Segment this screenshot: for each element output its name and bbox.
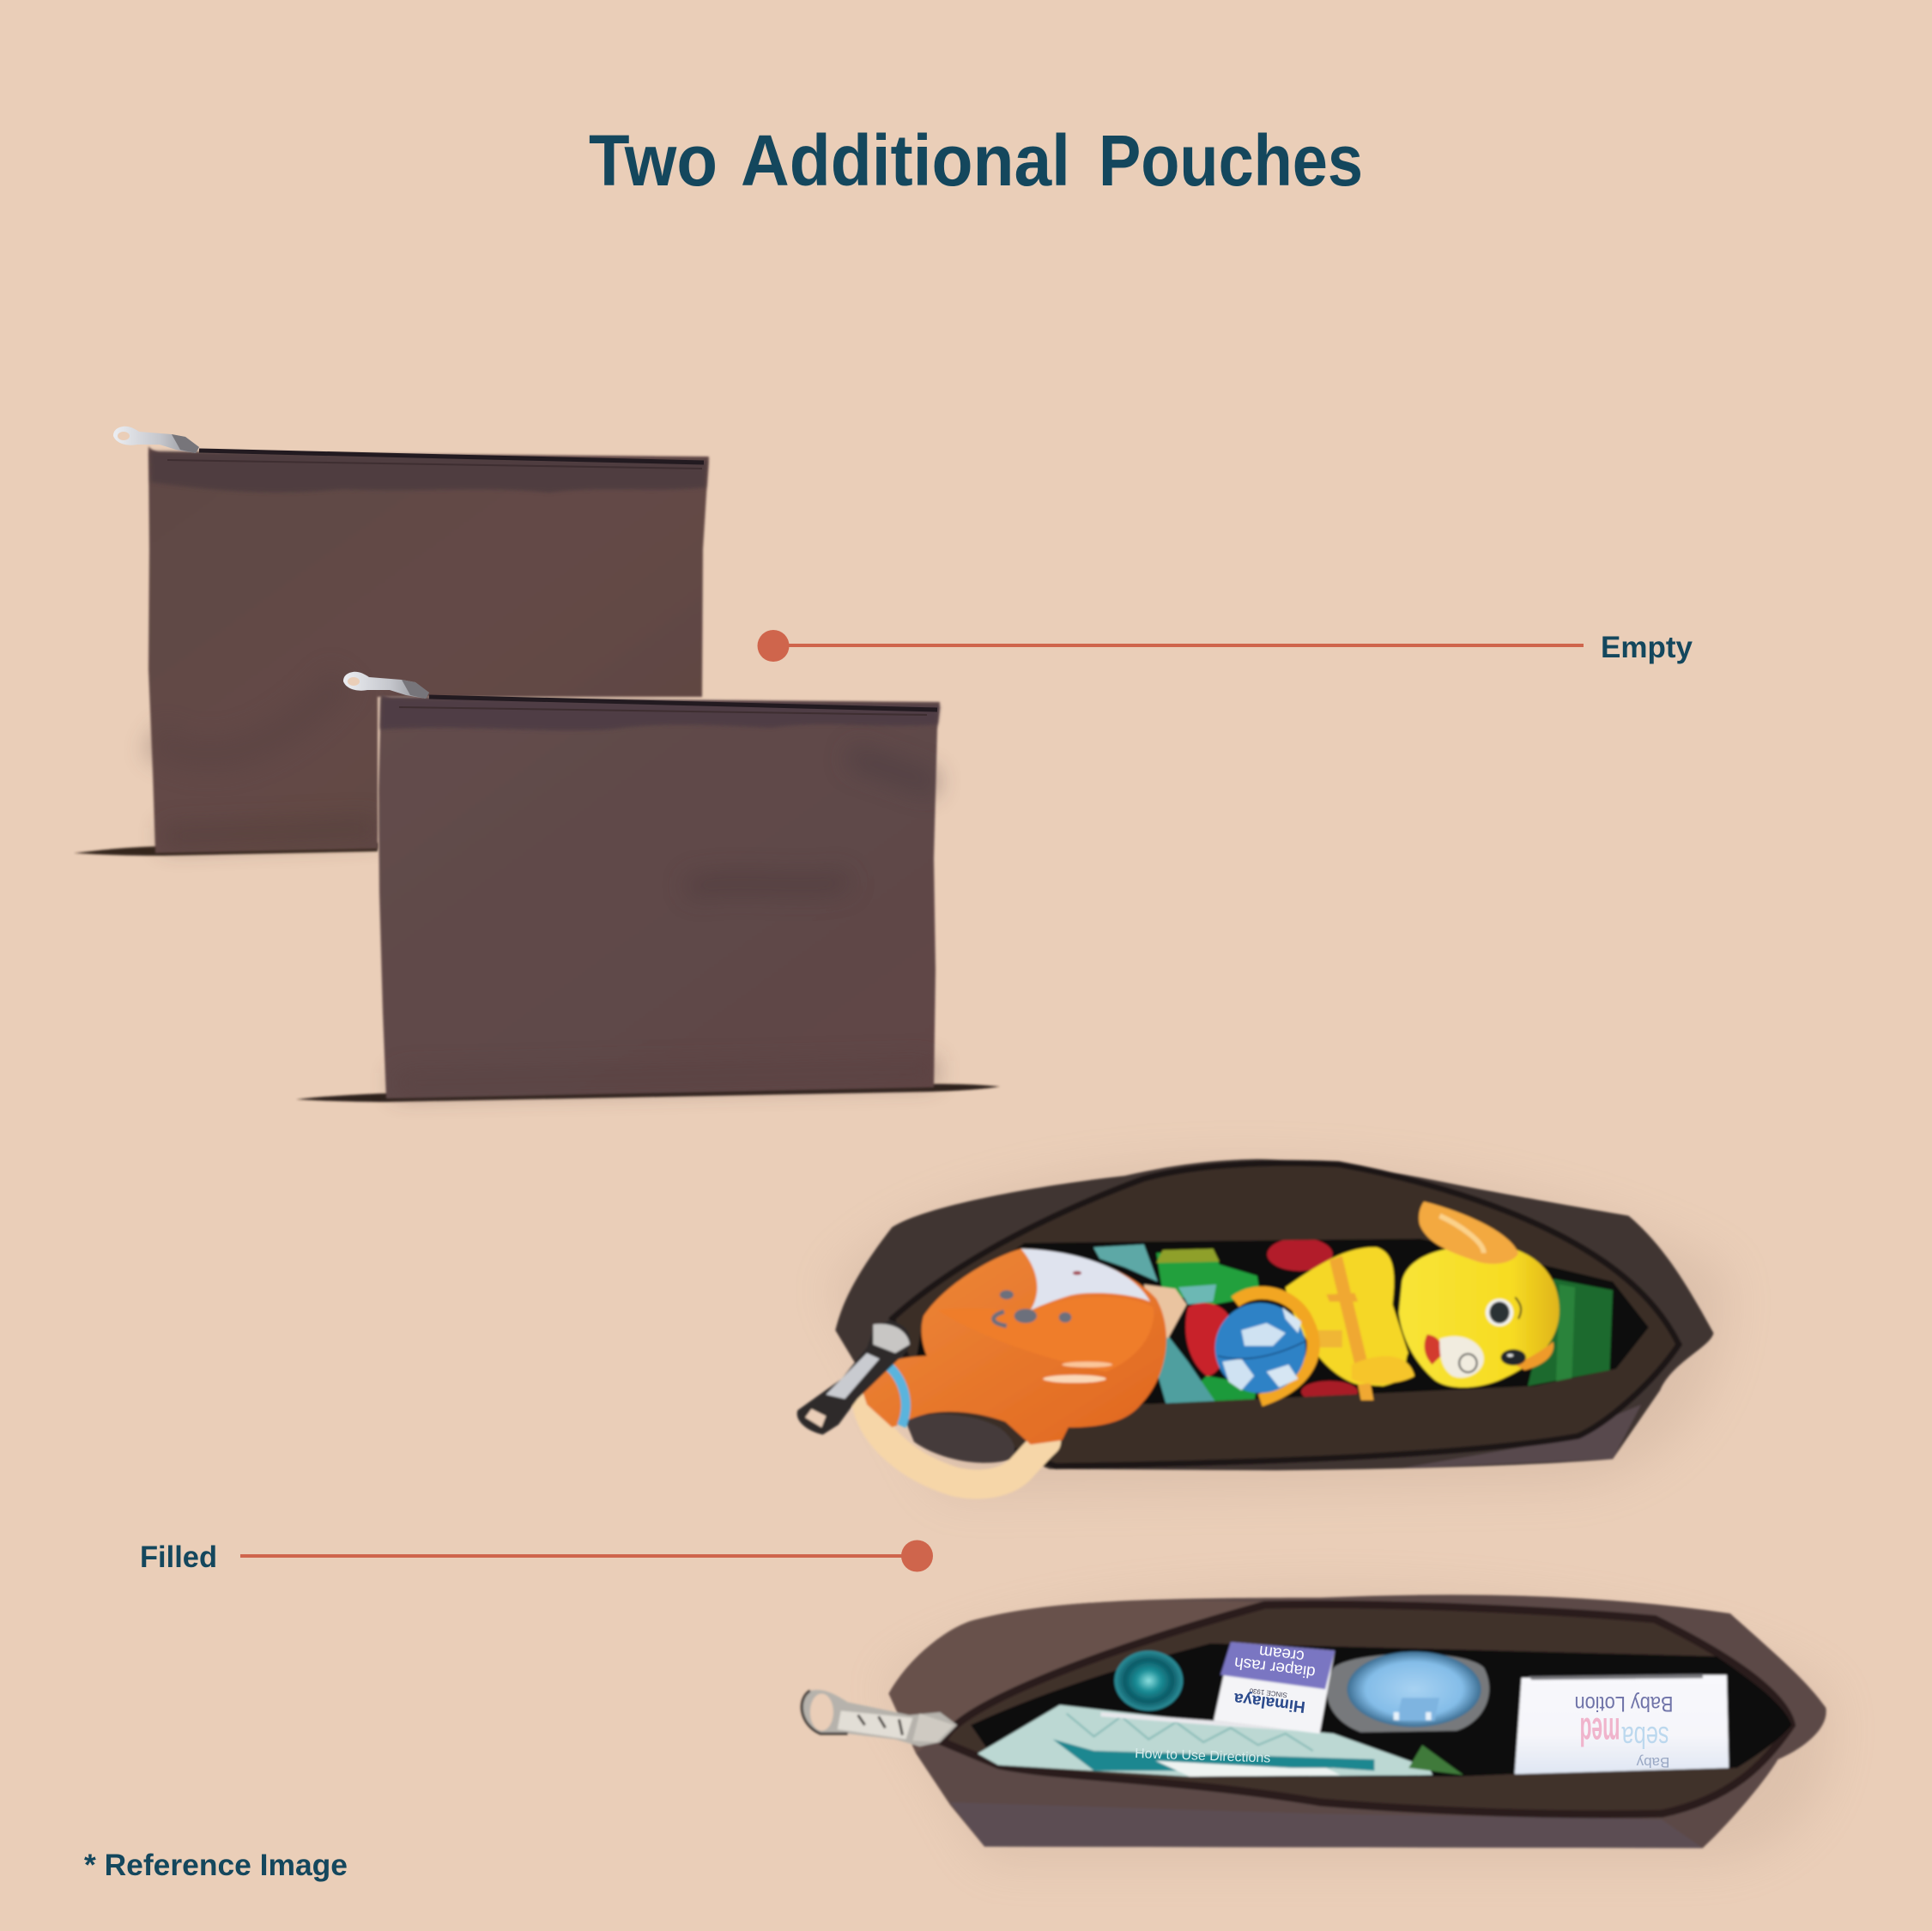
wipes text: How to Use Directions bbox=[1135, 1746, 1271, 1766]
lotion box text: Baby bbox=[1636, 1754, 1669, 1771]
title: Additional bbox=[741, 120, 1070, 201]
yellow duck toy bbox=[1215, 1202, 1560, 1401]
zipper pull bbox=[797, 1320, 910, 1435]
soft halo behind toiletries pouch bbox=[884, 1593, 1831, 1862]
cream box text: cream bbox=[1258, 1642, 1305, 1665]
cream box bbox=[1101, 1642, 1335, 1734]
orange fox toy bbox=[857, 1249, 1166, 1444]
zipper pull bbox=[113, 427, 199, 453]
empty pouch, back bbox=[74, 427, 709, 856]
title: Pouches bbox=[1099, 120, 1363, 201]
lotion box text: seba bbox=[1621, 1720, 1669, 1755]
bag body bbox=[888, 1595, 1826, 1848]
label: Empty: Empty bbox=[1601, 631, 1693, 664]
bag body bbox=[835, 1159, 1713, 1470]
cream box text bbox=[1232, 1642, 1317, 1716]
lining with zipper bbox=[943, 1604, 1792, 1814]
lotion box text: Baby Lotion bbox=[1574, 1692, 1674, 1716]
duck head bbox=[1399, 1246, 1560, 1388]
cream box text: diaper rash bbox=[1233, 1653, 1317, 1681]
cream box text: SINCE 1930 bbox=[1249, 1686, 1287, 1699]
cream box text: Himalaya bbox=[1232, 1689, 1306, 1716]
contents bbox=[1093, 1238, 1613, 1403]
connector: Empty bbox=[757, 630, 1693, 664]
filled pouch: toys bbox=[797, 1159, 1713, 1485]
filled pouch: toiletries bbox=[802, 1595, 1826, 1848]
interior dark bbox=[971, 1643, 1792, 1777]
wipes packet bbox=[978, 1705, 1463, 1777]
teether ring bbox=[867, 1405, 1046, 1485]
lotion box text bbox=[1574, 1692, 1674, 1771]
baby bottle cap bbox=[1327, 1651, 1489, 1732]
empty pouch, front bbox=[296, 672, 1000, 1102]
title: Two bbox=[589, 120, 718, 201]
lotion box text: med bbox=[1579, 1710, 1620, 1754]
teal cap bbox=[1114, 1650, 1183, 1710]
zipper pull bbox=[343, 672, 429, 699]
lotion box bbox=[1515, 1674, 1729, 1774]
connector: Filled bbox=[140, 1540, 933, 1574]
toy ball bbox=[1215, 1292, 1313, 1401]
footnote: * Reference Image bbox=[84, 1849, 348, 1882]
soft halo behind toy pouch bbox=[833, 1166, 1726, 1493]
label: Filled: Filled bbox=[140, 1541, 217, 1574]
lining with zipper bbox=[892, 1163, 1679, 1466]
interior dark bbox=[911, 1238, 1649, 1404]
title bbox=[589, 120, 1363, 201]
zipper pull bbox=[802, 1690, 957, 1746]
